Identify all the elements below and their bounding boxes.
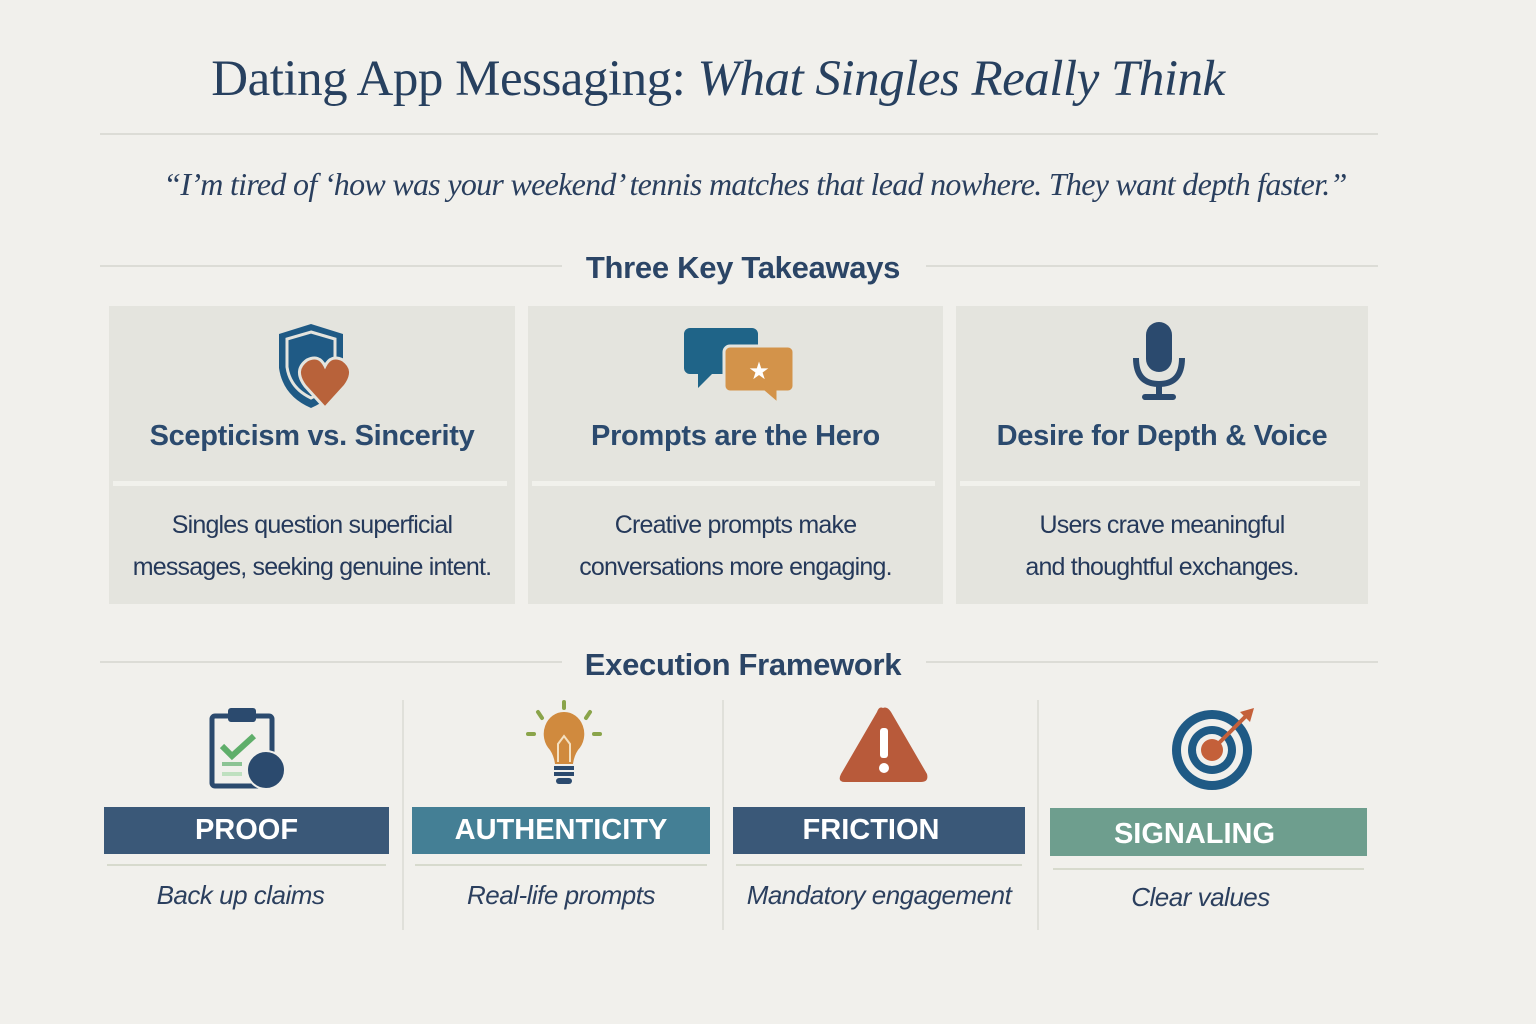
panel: scepticism: Scepticism vs. Sincerity [150,420,474,452]
panel: scepticism: Singles question superficial [172,511,452,539]
icon: light bulb [526,700,602,784]
column: friction [733,708,1025,910]
icon: microphone [1133,322,1185,400]
panel: prompts: conversations more engaging. [579,553,892,581]
column: proof: PROOF [195,814,298,846]
panel: scepticism: messages, seeking genuine intent. [133,553,491,581]
column: signaling: SIGNALING [1114,818,1275,850]
heading: execution framework: Execution Framework [585,647,901,682]
panel: prompts [528,306,943,604]
panel: scepticism [109,306,515,604]
icon: clipboard [210,708,284,788]
icon: target [1172,708,1254,790]
panel: depth: Users crave meaningful [1039,511,1284,539]
icon: warning [840,708,928,782]
column: signaling: Clear values [1131,882,1270,912]
column: proof [104,708,389,910]
column: authenticity [412,700,710,910]
panel: depth: Desire for Depth & Voice [997,420,1327,452]
panel: depth [956,306,1368,604]
icon: chat bubbles [684,328,792,401]
panel: prompts: Creative prompts make [615,511,856,539]
icon: shield heart [279,324,350,408]
column: authenticity: AUTHENTICITY [455,814,667,846]
column: proof: Back up claims [157,880,324,910]
heading: three key takeaways: Three Key Takeaways [586,250,900,285]
panel: depth: and thoughtful exchanges. [1025,553,1299,581]
title: Dating App Messaging: What Singles Really Think [211,51,1225,107]
panel: prompts: Prompts are the Hero [591,420,880,452]
column: friction: FRICTION [803,814,939,846]
column: signaling [1050,708,1367,912]
quote: “I’m tired of ‘how was your weekend’ tennis matches that lead nowhere. They want depth faster.” [163,166,1347,202]
column: authenticity: Real-life prompts [467,880,655,910]
column: friction: Mandatory engagement [747,880,1011,910]
icon: chat bubbles: ★ [748,358,770,385]
